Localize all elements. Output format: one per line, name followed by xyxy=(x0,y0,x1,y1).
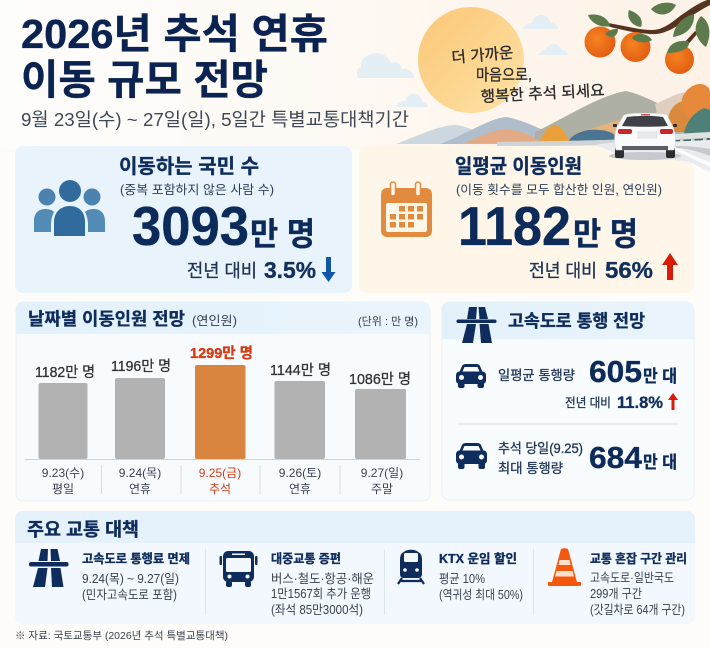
panel: people moving xyxy=(15,146,352,293)
heading: 일평균 이동인원 xyxy=(455,155,582,178)
bar: 9.27 xyxy=(349,371,411,459)
illustration: autumn scene xyxy=(357,7,710,149)
leaves xyxy=(588,3,709,53)
row: daily traffic: 605 xyxy=(589,354,642,389)
chart header: (단위 : 만 명) xyxy=(358,315,418,328)
measure: congestion: 299개 구간 xyxy=(590,587,642,601)
date labels: 주말 xyxy=(371,482,393,496)
heading: 이동하는 국민 수 xyxy=(119,155,259,178)
measures header xyxy=(15,511,695,543)
bar: 9.24 xyxy=(111,358,171,459)
row: peak traffic: 추석 당일(9.25) xyxy=(498,441,583,456)
mountains xyxy=(396,125,505,144)
road xyxy=(592,140,710,172)
row: peak traffic: 최대 통행량 xyxy=(498,461,563,476)
arrow: up xyxy=(662,253,678,280)
date labels: 평일 xyxy=(52,482,74,496)
bar: 9.24: 1196만 명 xyxy=(111,358,171,375)
icon: car xyxy=(456,443,487,469)
bar: 9.25 highlighted: 1299만 명 xyxy=(190,345,253,362)
measure: congestion: 교통 혼잡 구간 관리 xyxy=(590,552,687,566)
icon: traffic cone xyxy=(548,548,581,586)
comparison: 전년 대비 xyxy=(565,396,611,410)
car xyxy=(613,113,677,158)
row: daily traffic: 일평균 통행량 xyxy=(498,368,575,383)
chart header xyxy=(16,302,430,334)
bar: 9.26: 1144만 명 xyxy=(270,362,331,379)
measure: KTX discount: (역귀성 최대 50%) xyxy=(439,588,523,602)
road and car illustration xyxy=(592,113,710,172)
date labels: 9.25(금) xyxy=(199,466,241,480)
date labels: 연휴 xyxy=(129,482,151,496)
autumn trees xyxy=(465,84,710,143)
comparison: 56% xyxy=(605,257,653,283)
description: (이동 횟수를 모두 합산한 인원, 연인원) xyxy=(456,183,662,197)
number: 3093 xyxy=(132,195,249,257)
row: peak traffic: 만 대 xyxy=(643,453,677,472)
icon: people xyxy=(34,180,105,236)
icon: car xyxy=(456,364,486,388)
arrow: down xyxy=(322,257,336,282)
panel: daily forecast chart xyxy=(16,302,430,501)
panel: daily average xyxy=(359,146,694,293)
date labels: 9.24(목) xyxy=(119,466,161,480)
measure: toll waiver: 9.24(목) ~ 9.27(일) xyxy=(82,572,179,586)
date labels xyxy=(42,465,403,496)
date labels: 추석 xyxy=(209,482,231,496)
description: (중복 포함하지 않은 사람 수) xyxy=(120,183,274,197)
persimmons xyxy=(584,26,616,58)
measures header: 주요 교통 대책 xyxy=(27,519,139,540)
comparison xyxy=(187,257,316,283)
title: 이동 규모 전망 xyxy=(21,57,268,103)
row: peak traffic xyxy=(498,440,677,476)
guardrail xyxy=(497,132,710,149)
bar: 9.23 xyxy=(35,364,95,459)
comparison: 3.5% xyxy=(264,257,316,283)
highway header xyxy=(442,302,694,339)
top background wash xyxy=(0,0,710,150)
measure: public transit xyxy=(220,551,374,617)
measure: KTX discount xyxy=(398,550,523,602)
measure: congestion: (갓길차로 64개 구간) xyxy=(590,603,685,617)
measure: public transit: (좌석 85만3000석) xyxy=(271,603,363,617)
panel: highway forecast xyxy=(442,302,694,500)
greeting message: 더 가까운 xyxy=(451,44,514,67)
source note: ※ 자료: 국토교통부 (2026년 추석 특별교통대책) xyxy=(15,630,228,642)
comparison: 전년 대비 xyxy=(187,261,257,281)
number: 만 명 xyxy=(250,216,315,252)
comparison xyxy=(565,393,663,412)
date labels: 9.27(일) xyxy=(361,466,403,480)
comparison xyxy=(529,257,653,283)
panel: main traffic measures xyxy=(15,511,695,624)
row: peak traffic: 684 xyxy=(589,440,643,475)
measure: KTX discount: 평균 10% xyxy=(439,572,485,586)
chart header: 날짜별 이동인원 전망 xyxy=(28,309,185,329)
comparison: 11.8% xyxy=(617,393,663,412)
icon: train xyxy=(398,550,424,584)
title xyxy=(21,11,328,103)
title: 2026년 추석 연휴 xyxy=(21,11,328,57)
date labels: 연휴 xyxy=(289,482,311,496)
measure: toll waiver: 고속도로 통행료 면제 xyxy=(82,551,190,566)
bar: 9.26 xyxy=(270,362,331,459)
measure: KTX discount: KTX 운임 할인 xyxy=(439,552,517,566)
row: daily traffic xyxy=(498,354,677,389)
icon: bus xyxy=(220,551,258,587)
measure: toll waiver: (민자고속도로 포함) xyxy=(82,588,177,602)
icon: highway xyxy=(456,307,496,343)
bar: 9.27: 1086만 명 xyxy=(349,371,411,388)
number: 만 명 xyxy=(573,216,638,252)
date labels: 9.23(수) xyxy=(42,466,84,480)
measure: congestion xyxy=(548,548,687,617)
bar: 9.25 highlighted xyxy=(190,345,253,459)
arrow: up xyxy=(668,393,678,410)
date labels: 9.26(토) xyxy=(279,466,321,480)
greeting message xyxy=(451,44,605,106)
bar: 9.23: 1182만 명 xyxy=(35,364,95,381)
greeting message: 마음으로, xyxy=(476,66,532,84)
illustration: persimmon branch xyxy=(584,0,710,74)
row: daily traffic: 만 대 xyxy=(643,367,677,386)
measure: congestion: 고속도로·일반국도 xyxy=(590,571,674,585)
subtitle: special period: 9월 23일(수) ~ 27일(일), 5일간 특별교통대책기간 xyxy=(21,109,409,130)
measure: public transit: 1만1567회 추가 운행 xyxy=(271,586,371,601)
number: 1182 xyxy=(458,195,571,257)
measure: toll waiver xyxy=(29,549,190,602)
chart header: (연인원) xyxy=(192,314,237,328)
greeting message: 행복한 추석 되세요 xyxy=(480,82,605,106)
icon: calendar xyxy=(381,182,432,237)
measure: public transit: 버스·철도·항공·해운 xyxy=(271,572,374,586)
number xyxy=(132,195,315,257)
heading: 고속도로 통행 전망 xyxy=(508,311,645,331)
clouds xyxy=(357,15,568,107)
number xyxy=(458,195,638,257)
icon: full moon xyxy=(418,7,524,113)
icon: highway xyxy=(29,549,68,587)
comparison: 전년 대비 xyxy=(529,261,597,281)
bar chart xyxy=(25,345,420,460)
measure: public transit: 대중교통 증편 xyxy=(271,552,341,566)
